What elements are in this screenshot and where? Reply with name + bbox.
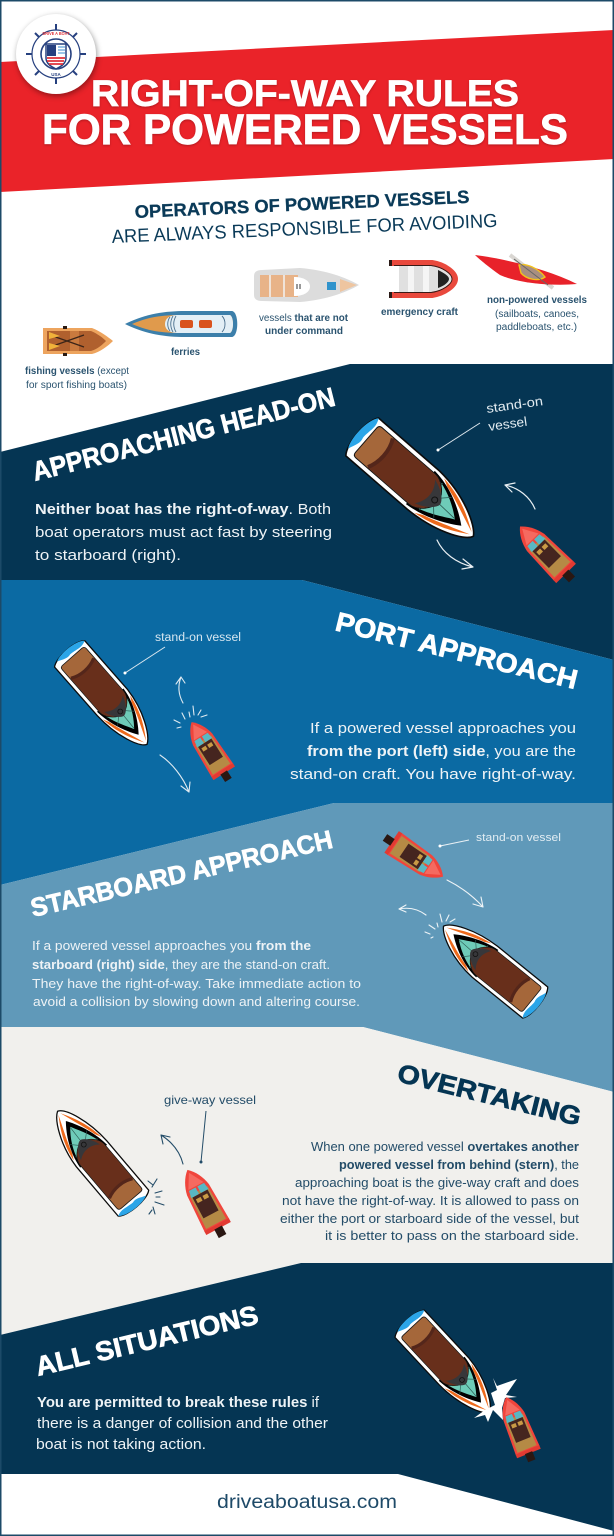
text: overtaking body: not have the right-of-way. It is allowed to pass on [282,1194,579,1208]
heading: approaching head-on: APPROACHING HEAD-ON [29,382,338,487]
text: overtaking body: approaching boat is the give-way craft and does [295,1176,579,1190]
text: starboard body: They have the right-of-way. Take immediate action to [32,976,361,991]
label: stand-on vessel, port [124,632,241,674]
label: stand-on vessel, starboard: stand-on vessel [476,832,561,844]
icon: large boat, head-on [341,414,491,554]
text: port approach body: stand-on craft. You have right-of-way. [290,766,576,783]
text: overtaking body: powered vessel from behind (stern), the [339,1158,579,1172]
panel: all situations [0,1263,614,1531]
icon: large boat, starboard [430,912,552,1021]
panel: approaching head-on [0,364,614,660]
text: overtaking body: When one powered vessel overtakes another [311,1140,579,1154]
label: give-way vessel [164,1093,256,1164]
label: non-powered vessels [487,295,587,333]
panel: red title band [0,30,614,192]
icon: small boat, port [181,715,239,787]
label: vessels not under command [259,313,349,337]
title [42,73,568,154]
panel: starboard approach [0,803,614,1092]
heading: port approach: PORT APPROACH [333,607,581,695]
icon: small boat, head-on [510,517,582,589]
icon: large boat, collision [391,1306,506,1425]
logo: USA [51,72,61,77]
text: port approach body: If a powered vessel approaches you [310,720,576,737]
text: starboard body: If a powered vessel approaches you from the [32,938,311,953]
label: non-powered vessels: (sailboats, canoes, [495,309,579,320]
title: FOR POWERED VESSELS [42,106,568,154]
label: fishing vessels: for sport fishing boats) [26,380,127,391]
heading: operators of powered vessels: OPERATORS OF POWERED VESSELS [134,187,470,222]
label: stand-on vessel, head-on: stand-on [485,393,544,416]
text: overtaking body [280,1140,580,1243]
text: all situations body [36,1395,328,1453]
panel: overtaking [0,1027,614,1335]
text: all situations body: boat is not taking action. [36,1437,206,1453]
heading: starboard approach: STARBOARD APPROACH [28,824,335,923]
icon: fishing boat [43,326,113,356]
icon: small boat, starboard [378,827,450,887]
label: stand-on vessel, head-on: vessel [487,414,528,434]
text: port approach body: from the port (left) side , you are the [307,743,576,760]
arrows: head-on [437,483,535,569]
text: head-on body: Neither boat has the right-of-way . Both [35,501,331,518]
panel: port approach [0,580,614,885]
text: all situations body: You are permitted to break these rules if [37,1395,320,1411]
label: stand-on vessel, head-on [436,393,544,452]
label: vessels not under command: under command [265,326,343,337]
icon: small boat, collision [494,1392,544,1466]
footer url: driveaboatusa.com [217,1492,397,1513]
heading: overtaking: OVERTAKING [395,1058,584,1132]
label: non-powered vessels: paddleboats, etc.) [496,322,577,333]
title: RIGHT-OF-WAY RULES [91,73,519,114]
text: head-on body [35,501,332,564]
icon: kayak [475,255,577,288]
text: all situations body: there is a danger of collision and the other [37,1416,328,1432]
arrows: starboard [399,880,483,938]
label: stand-on vessel, starboard [438,832,561,848]
text: head-on body: to starboard (right). [35,547,181,564]
label: stand-on vessel, port: stand-on vessel [155,632,241,644]
text: head-on body: boat operators must act fast by steering [35,524,332,541]
text: starboard body [32,938,361,1009]
icon: yacht [254,268,359,302]
logo [16,14,96,94]
arrows: overtaking [148,1135,183,1214]
label: fishing vessels [25,366,129,391]
text: starboard body: starboard (right) side, they are the stand-on craft. [32,957,330,972]
icon: large boat, port [51,637,163,757]
label: fishing vessels: fishing vessels (except [25,366,129,377]
label: emergency craft: emergency craft [381,307,459,318]
icon: emergency craft [389,260,455,298]
label: ferries: ferries [171,347,200,358]
heading: all situations: ALL SITUATIONS [32,1300,261,1382]
icon: large boat, overtaking [41,1099,152,1220]
heading: operators of powered vessels: ARE ALWAYS RESPONSIBLE FOR AVOIDING [111,211,498,248]
icon: collision burst [474,1378,517,1422]
text: overtaking body: either the port or starboard side of the vessel, but [280,1212,580,1226]
text: overtaking body: it is better to pass on the starboard side. [325,1229,579,1243]
heading: operators of powered vessels [111,187,498,248]
text: port approach body [290,720,576,783]
label: non-powered vessels: non-powered vessels [487,295,587,306]
icon: ferry [125,311,237,337]
text: starboard body: avoid a collision by slowing down and altering course. [33,994,360,1009]
logo: DRIVE A BOAT [42,31,70,36]
icon: small boat, overtaking [175,1163,235,1243]
label: give-way vessel: give-way vessel [164,1093,256,1107]
label: vessels not under command: vessels that are not [259,313,349,324]
arrows: port [160,677,207,792]
